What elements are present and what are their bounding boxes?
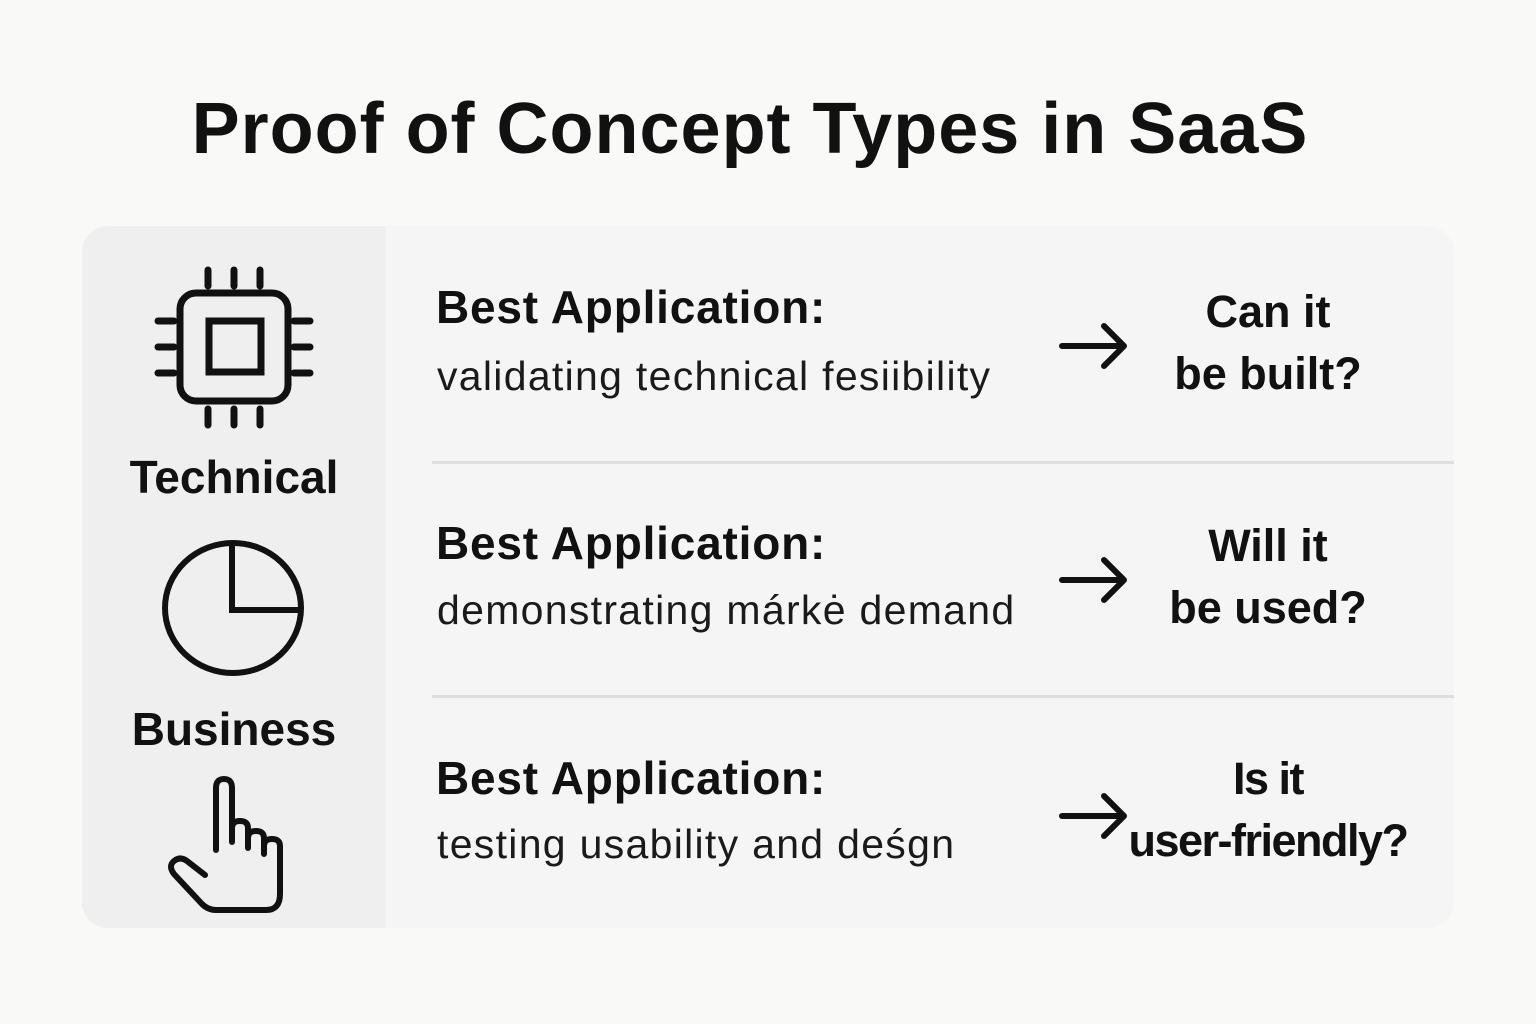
text: be used? — [1169, 582, 1367, 633]
panel: main table — [82, 226, 1454, 928]
arrow 1 — [1059, 323, 1127, 369]
text: be built? — [1174, 348, 1362, 399]
text: user-friendly? — [1128, 815, 1408, 866]
text: demonstrating márkė demand — [437, 587, 1015, 633]
label: Business: Business — [132, 703, 336, 755]
icon: hand pointer — [168, 776, 283, 913]
icon: chip — [154, 266, 314, 428]
label: Technical: Technical — [130, 451, 338, 503]
text: Will it — [1208, 520, 1328, 571]
icon: pie chart — [162, 540, 304, 676]
text: validating technical fesiibility — [437, 353, 991, 399]
arrow 3 — [1059, 793, 1127, 839]
row 2: Best Application: — [436, 517, 826, 569]
text: Can it — [1205, 286, 1330, 337]
text: Is it — [1233, 753, 1303, 804]
arrow 2 — [1059, 557, 1127, 603]
row 1: Best Application: — [436, 281, 826, 333]
left column — [82, 226, 386, 928]
text: testing usability and deśgn — [437, 821, 955, 867]
title: Proof of Concept Types in SaaS — [192, 89, 1308, 169]
row 3: Best Application: — [436, 752, 826, 804]
